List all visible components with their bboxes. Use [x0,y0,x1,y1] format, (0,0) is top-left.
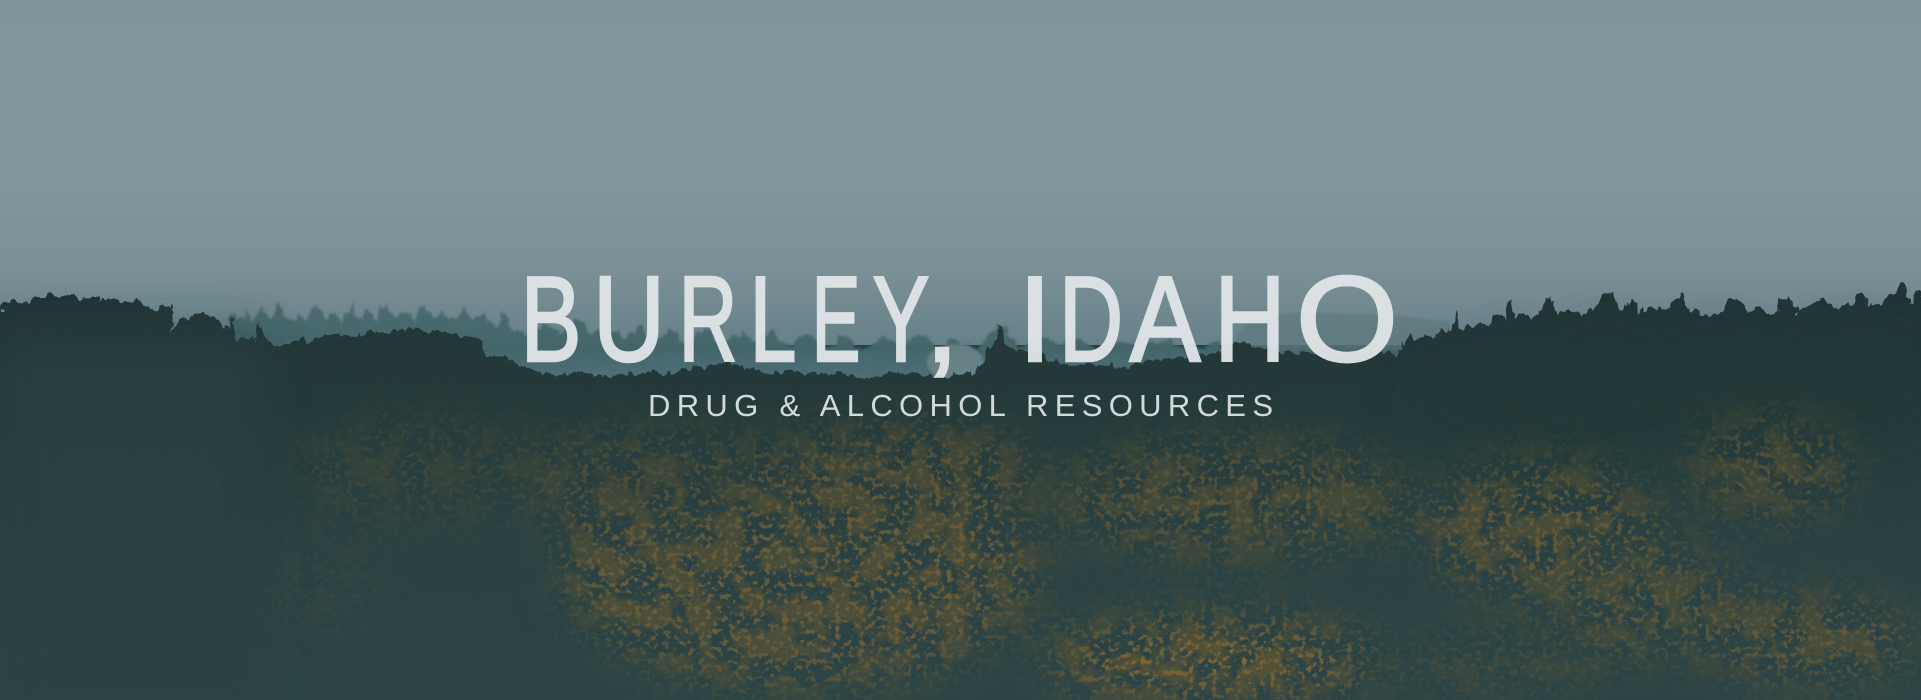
sky [0,0,1921,345]
title: Burley, Idaho: L [750,251,796,387]
subtitle: drug and alcohol resources: DRUG & ALCOHOL RESOURCES [648,388,1273,423]
title: Burley, Idaho: I [1018,251,1052,387]
distant misty tree line [225,304,1450,400]
title: Burley, Idaho: E [812,251,860,387]
foreground forest silhouette [0,283,1921,700]
ochre foliage texture [286,398,1921,700]
darker conifer shapes on the right [1400,330,1921,470]
title: Burley, Idaho [520,251,1398,387]
title: Burley, Idaho: U [593,251,665,387]
title: Burley, Idaho: B [520,251,582,387]
title: Burley, Idaho: O [1296,251,1398,387]
title: Burley, Idaho: A [1130,251,1200,387]
title: Burley, Idaho: H [1214,251,1286,387]
title: Burley, Idaho: R [678,251,738,387]
title: Burley, Idaho: , [925,251,959,387]
title: Burley, Idaho: Y [873,251,929,387]
left dark vignette [0,340,260,700]
misty glow in the valley [927,344,983,380]
title: Burley, Idaho: D [1059,251,1123,387]
